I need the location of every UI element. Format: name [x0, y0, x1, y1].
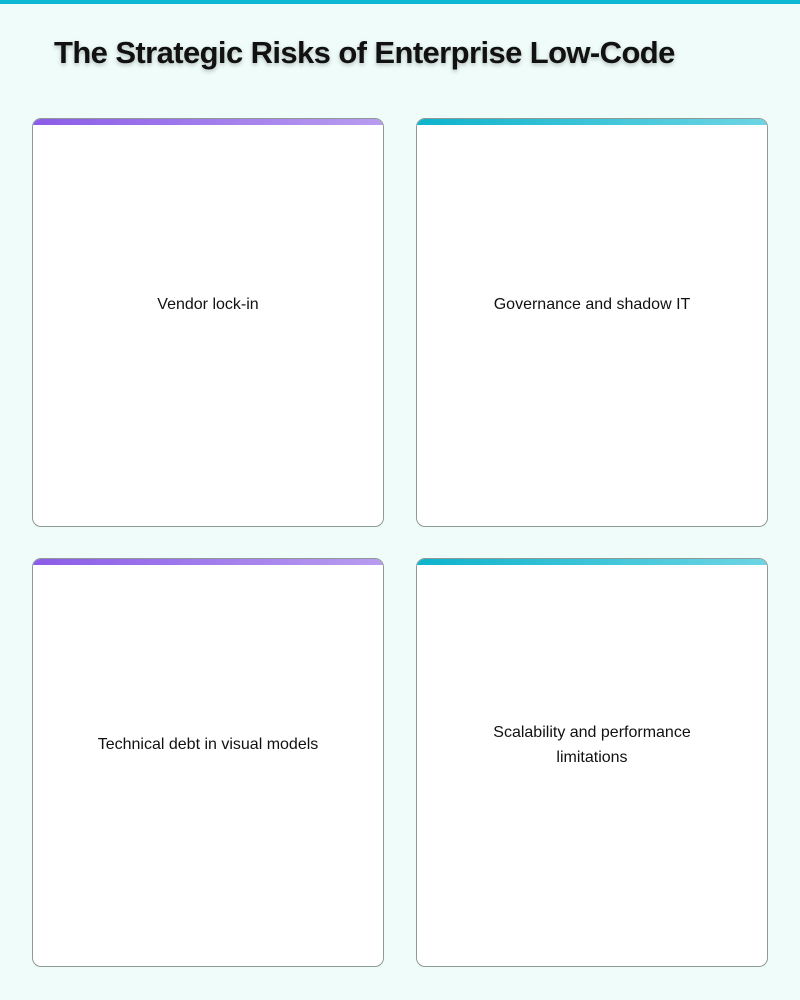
panel: vendor lock-in: Vendor lock-in [157, 296, 259, 313]
panel: technical debt: Technical debt in visual models [98, 736, 318, 753]
panel: vendor lock-in [32, 118, 384, 527]
panel: governance [416, 118, 768, 527]
title: The Strategic Risks of Enterprise Low-Code [54, 35, 675, 70]
panel: technical debt [32, 558, 384, 967]
panel: scalability: Scalability and performance limitations [493, 724, 691, 766]
panel: scalability [416, 558, 768, 967]
panel: governance: Governance and shadow IT [494, 296, 690, 313]
